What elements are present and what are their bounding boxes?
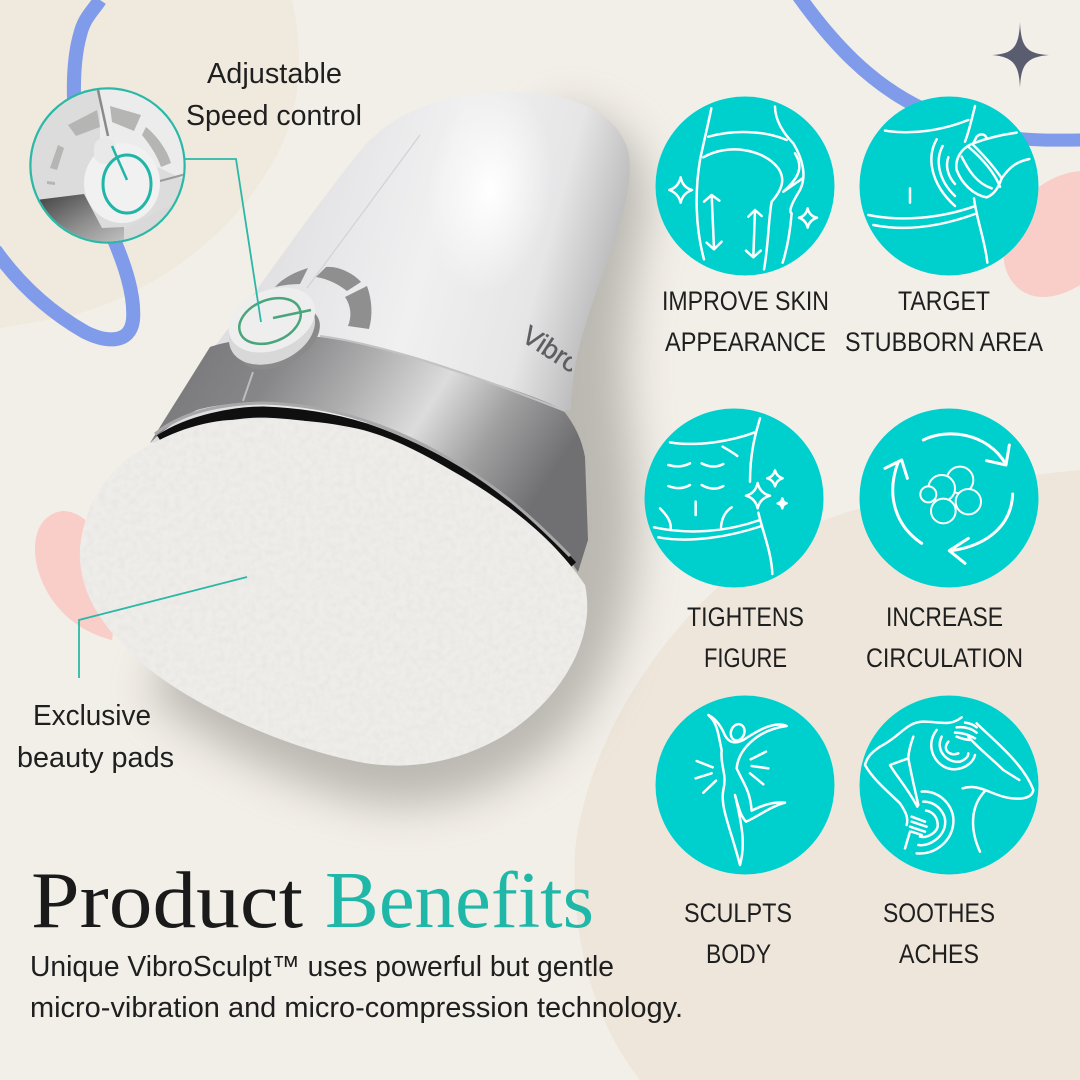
title: Product — [31, 857, 303, 945]
label: TARGET — [898, 286, 990, 316]
icon: massager on torso — [860, 96, 1038, 276]
callout: beauty pads — [17, 577, 247, 774]
band top groove — [320, 336, 565, 411]
band inner black gap — [160, 412, 572, 566]
description text: micro-vibration and micro-compression technology. — [30, 992, 683, 1024]
benefit: increase circulation: CIRCULATION — [866, 643, 1023, 673]
body seam — [307, 135, 420, 288]
device body — [150, 92, 630, 443]
leader line — [185, 159, 261, 322]
benefit: improve skin appearance — [656, 96, 834, 357]
benefit: tightens figure — [644, 408, 824, 673]
benefit: soothes aches: ACHES — [899, 939, 979, 969]
icon: abdomen with sparkles — [644, 408, 824, 588]
benefit: target stubborn area — [845, 96, 1043, 357]
body highlight — [414, 77, 566, 303]
icon: four-point star — [992, 22, 1049, 88]
callout label: Exclusive — [33, 700, 151, 732]
brand mark on device: Vibro — [517, 320, 586, 379]
description text: Unique VibroSculpt™ uses powerful but gentle — [30, 951, 614, 983]
decorative line: blue right — [1015, 138, 1080, 140]
silver band — [150, 337, 588, 572]
exclusive beauty pad — [80, 419, 587, 766]
product: massager device — [80, 77, 630, 766]
benefit: increase circulation — [860, 408, 1038, 673]
callout: speed control: Speed control — [186, 100, 362, 132]
icon: circulating cells — [860, 408, 1038, 588]
label: TIGHTENS — [687, 602, 804, 632]
icon: thigh and hip — [656, 96, 834, 276]
band lower rim — [155, 403, 570, 556]
title: Benefits — [325, 857, 594, 945]
description text — [30, 951, 683, 1024]
benefit: sculpts body — [656, 696, 834, 969]
decorative line: blue left upper — [74, 0, 100, 120]
decorative line: blue top right — [798, 0, 925, 110]
benefit: tightens figure: FIGURE — [704, 643, 787, 673]
benefit: sculpts body: BODY — [706, 939, 771, 969]
decorative line: blue left lower — [0, 235, 133, 339]
label: INCREASE — [886, 602, 1003, 632]
device drop shadow — [150, 110, 647, 805]
label: SOOTHES — [883, 898, 995, 928]
callout: speed control — [185, 58, 362, 322]
background blob: pink left — [35, 511, 120, 640]
benefit: improve skin appearance: APPEARANCE — [665, 327, 826, 357]
label: IMPROVE SKIN — [662, 286, 829, 316]
inset: close-up of control dial — [30, 88, 190, 245]
icon: back with pain rings — [860, 696, 1038, 874]
background blob: pink right — [1003, 171, 1080, 297]
control button — [218, 275, 331, 382]
benefit: target stubborn area: STUBBORN AREA — [845, 327, 1043, 357]
benefit: soothes aches — [860, 696, 1038, 969]
leader line — [79, 577, 247, 678]
background blob: bottom right — [574, 470, 1080, 1080]
title — [31, 857, 594, 945]
background blob: top left — [0, 0, 299, 328]
band seam — [243, 372, 253, 401]
callout label: Adjustable — [207, 58, 342, 90]
icon: dancing figure — [656, 696, 834, 874]
speed segments — [275, 267, 371, 329]
callout: beauty pads: beauty pads — [17, 742, 174, 774]
label: SCULPTS — [684, 898, 792, 928]
